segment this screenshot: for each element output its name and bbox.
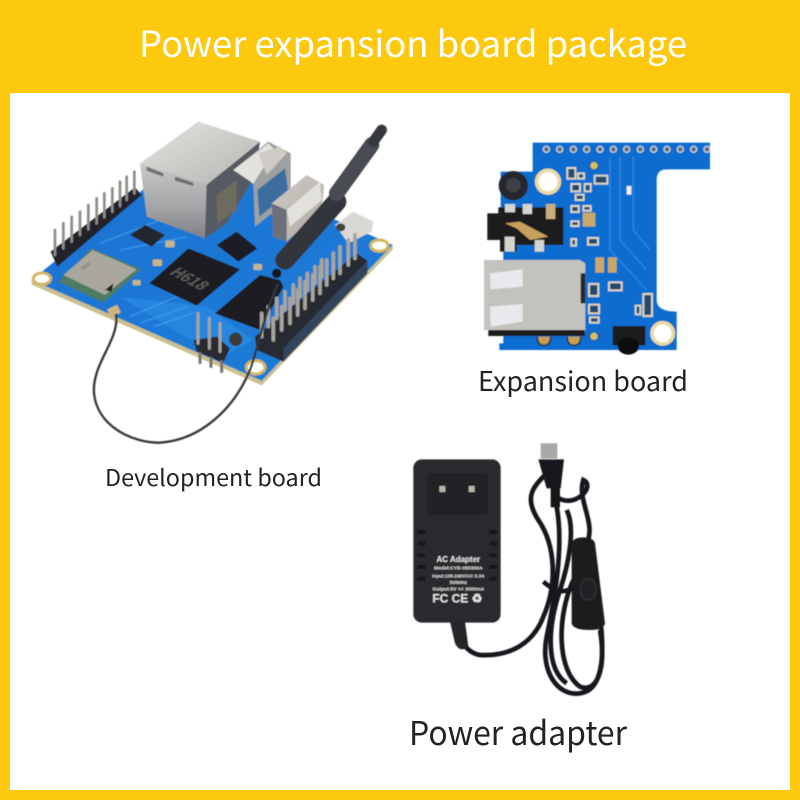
adapter label text: FC CE ♻ [432,592,482,606]
ir receiver [613,326,645,355]
adapter body [413,459,501,623]
board surface [32,154,393,381]
inline switch [572,537,605,630]
development board photo [32,122,393,443]
usb port upper [233,142,291,227]
adapter label text: 50/60Hz [450,580,468,585]
small components [133,241,262,285]
usb port lower [272,175,324,242]
flash chip [217,232,257,262]
mount holes [537,170,559,193]
small chip [130,225,165,247]
micro usb [335,212,373,243]
push button [499,171,528,200]
adapter label text: AC Adapter [437,555,480,564]
antenna [272,130,382,278]
right pin header [255,235,367,362]
mounting holes [33,240,388,374]
label: power adapter: Power adapter [409,707,627,755]
adapter label text: Output:5V == 3000mA [432,587,485,593]
ethernet jack [140,122,260,238]
expansion board photo [484,143,710,355]
H618 processor [149,248,240,306]
memory chip [215,275,283,330]
H618 processor: H618 [164,263,217,294]
label: development board: Development board [105,459,322,493]
audio jack [487,204,563,252]
adapter label text: Model:CYD-050300A [434,565,483,571]
wifi module [58,248,142,303]
3-pin header [193,313,242,372]
power adapter photo [413,443,605,694]
ufl connector [107,305,121,317]
micro usb plug [541,443,557,459]
cable loops [455,473,602,694]
title: Power expansion board package [139,16,687,68]
wifi module: MOD [80,261,92,272]
small passive components [567,168,652,323]
header holes [543,146,710,152]
left pin header [51,172,142,267]
usb socket [484,260,585,345]
board edge [32,245,393,385]
adapter label text: Input:100-240V/AC 0.3A [432,573,485,578]
antenna cable [94,283,278,443]
adapter label text [432,555,485,606]
label: expansion board: Expansion board [478,360,688,399]
strain relief [450,622,468,649]
pcb [499,143,710,350]
